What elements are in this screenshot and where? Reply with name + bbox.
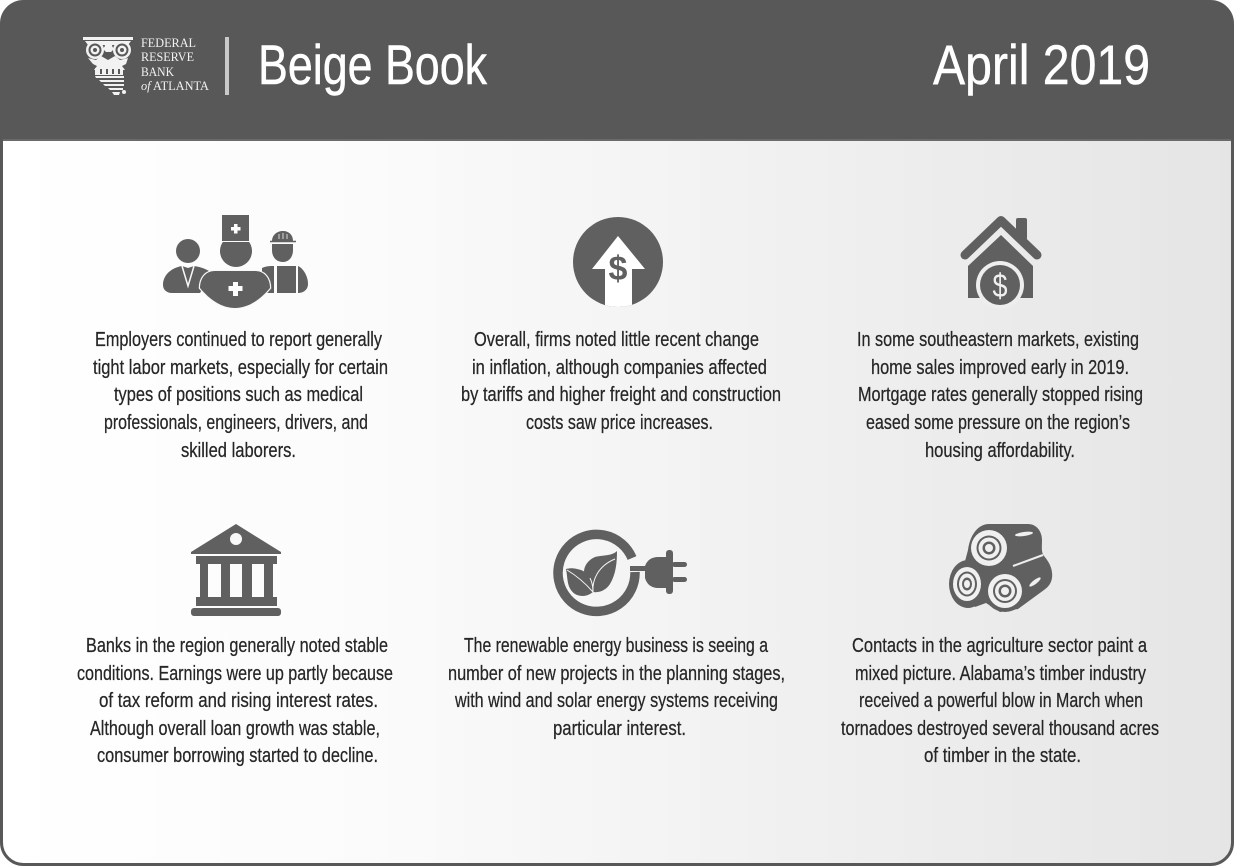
logo wordmark: RESERVE	[141, 49, 194, 64]
icon: leaf plug	[558, 534, 687, 611]
text: banking: Although overall loan growth was stable,	[90, 718, 380, 740]
text: housing: Mortgage rates generally stopped rising	[858, 384, 1143, 406]
text: labor markets: Employers continued to report generally	[95, 329, 382, 351]
text: labor markets: types of positions such as medical	[114, 384, 363, 406]
icon: house with dollar coin: $	[992, 267, 1008, 304]
text: renewable energy: particular interest.	[553, 718, 686, 740]
title: Beige Book	[258, 33, 488, 96]
text: labor markets: professionals, engineers, drivers, and	[104, 412, 368, 434]
logo wordmark	[141, 35, 210, 93]
text: housing: home sales improved early in 2019.	[871, 357, 1129, 379]
text: inflation	[461, 329, 781, 434]
text: renewable energy: The renewable energy business is seeing a	[464, 635, 769, 657]
text: labor markets	[93, 329, 388, 462]
logo divider	[225, 37, 229, 95]
text: renewable energy: with wind and solar energy systems receiving	[454, 690, 778, 712]
text: inflation: Overall, firms noted little recent change	[474, 329, 759, 351]
logo wordmark: FEDERAL	[141, 35, 196, 50]
logo emblem	[83, 37, 133, 95]
text: banking: conditions. Earnings were up partly because	[77, 663, 393, 685]
text: agriculture: mixed picture. Alabama’s timber industry	[855, 663, 1146, 685]
icon: dollar up arrow	[573, 217, 663, 310]
text: housing: In some southeastern markets, existing	[857, 329, 1139, 351]
logo: Federal Reserve Bank of Atlanta	[83, 35, 210, 95]
logo wordmark: BANK	[141, 64, 175, 79]
text: labor markets: tight labor markets, especially for certain	[93, 357, 388, 379]
date: April 2019	[933, 33, 1150, 96]
text: agriculture: received a powerful blow in March when	[859, 690, 1143, 712]
icon: timber logs	[949, 524, 1052, 612]
text: agriculture: Contacts in the agriculture sector paint a	[852, 635, 1148, 657]
icon: workers	[163, 215, 308, 308]
text: inflation: costs saw price increases.	[526, 412, 713, 434]
text: banking: Banks in the region generally noted stable	[86, 635, 388, 657]
panel: agriculture	[841, 524, 1159, 767]
text: labor markets: skilled laborers.	[181, 440, 296, 462]
header band	[0, 0, 1235, 141]
text: banking	[77, 635, 393, 767]
panel: housing	[857, 218, 1143, 462]
panel: labor markets	[93, 215, 388, 462]
text: renewable energy: number of new projects in the planning stages,	[448, 663, 785, 685]
text: banking: consumer borrowing started to decline.	[97, 745, 378, 767]
text: banking: of tax reform and rising interest rates.	[99, 690, 378, 712]
text: housing	[857, 329, 1143, 462]
panel: banking	[77, 524, 393, 767]
text: inflation: in inflation, although companies affected	[472, 357, 767, 379]
text: housing: housing affordability.	[925, 440, 1075, 462]
text: agriculture: of timber in the state.	[924, 745, 1081, 767]
icon: house with dollar coin	[965, 218, 1037, 309]
icon: dollar up arrow: $	[609, 250, 628, 288]
text: renewable energy	[448, 635, 785, 740]
text: agriculture	[841, 635, 1159, 767]
text: inflation: by tariffs and higher freight and construction	[461, 384, 781, 406]
text: agriculture: tornadoes destroyed several thousand acres	[841, 718, 1159, 740]
icon: bank building	[191, 524, 281, 616]
panel: renewable energy	[448, 534, 785, 740]
panel: inflation	[461, 217, 781, 434]
logo wordmark: of ATLANTA	[141, 78, 210, 93]
text: housing: eased some pressure on the region’s	[866, 412, 1130, 434]
